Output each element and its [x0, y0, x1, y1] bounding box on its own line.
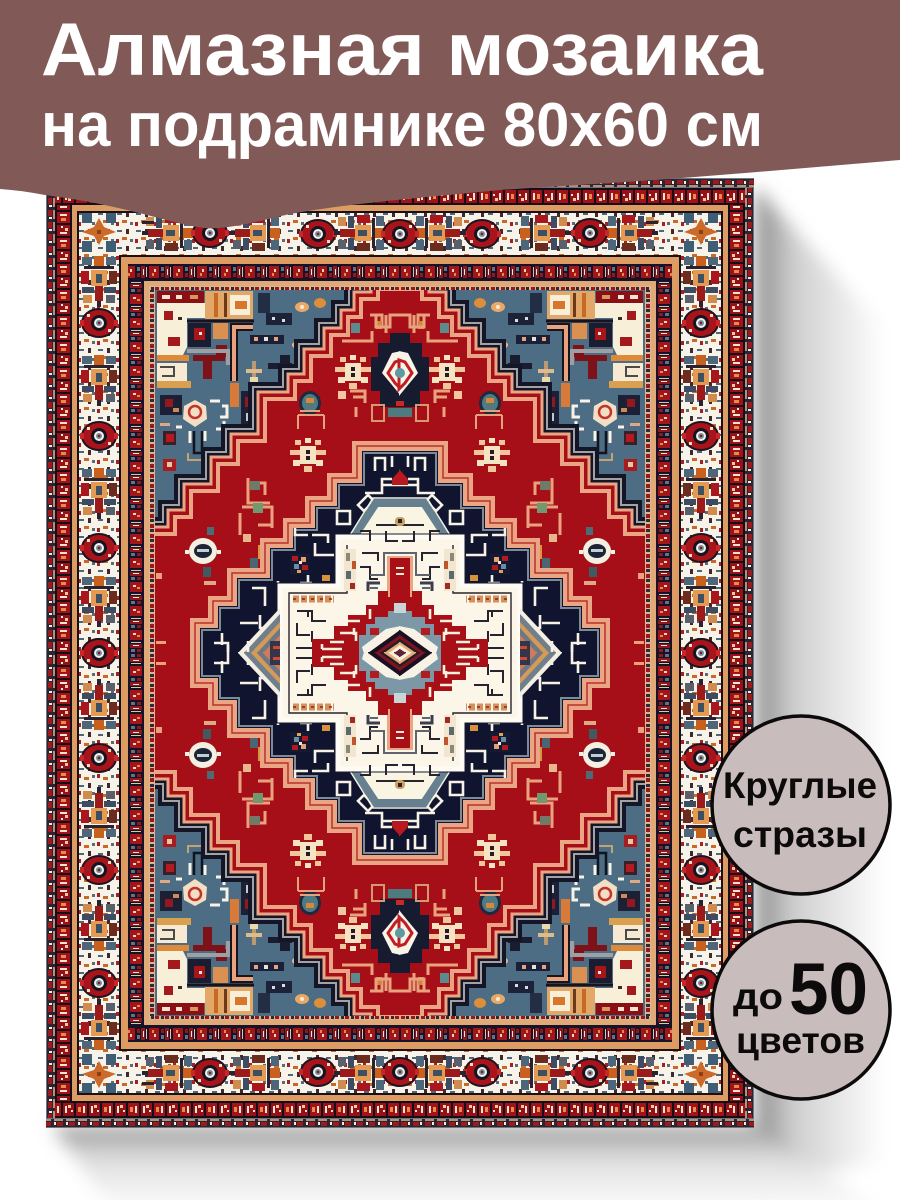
title: Алмазная мозаика	[41, 7, 764, 91]
red field	[150, 291, 401, 654]
field background blue corner	[155, 290, 401, 654]
badge word: до: до	[733, 976, 783, 1017]
round motif on red	[185, 527, 221, 585]
white spiky surround	[362, 626, 401, 654]
carpet top-right quarter	[381, 178, 754, 668]
white maze on navy	[214, 456, 401, 661]
top centre medallion on red field	[371, 315, 405, 421]
inner beaded line	[149, 286, 401, 654]
cream cut-outs in red cross	[322, 609, 370, 649]
black maze on cream	[296, 525, 398, 648]
red stepped cross	[312, 591, 401, 654]
carpet top-left quarter with borders, field and medallion	[46, 178, 419, 668]
inner tan line	[144, 281, 401, 654]
outer thin strip	[46, 178, 401, 654]
left border motifs	[80, 256, 118, 668]
multicolour strip on cross	[344, 549, 356, 591]
central stepped medallion	[195, 446, 404, 661]
canvas shadow below	[52, 1126, 880, 1200]
red triangle ornament	[392, 469, 401, 485]
blue corner rosette	[176, 400, 227, 460]
carpet bottom-left quarter	[46, 638, 419, 1128]
badge: round rhinestones	[712, 716, 890, 894]
subtitle: на подрамнике 80х60 см	[41, 91, 763, 160]
small field motifs on red	[156, 315, 386, 644]
white floral border	[77, 211, 419, 668]
badge number: 50: 50	[789, 949, 868, 1030]
badge text line 2: стразы	[733, 814, 867, 855]
inner dark band	[128, 264, 401, 654]
border corner star	[82, 213, 116, 252]
tan dashes on the cross	[293, 596, 334, 602]
stepped border of the red field	[150, 291, 401, 536]
multicolour patch on navy	[290, 554, 310, 574]
header banner	[0, 0, 900, 228]
corner ornaments	[150, 291, 401, 654]
badge text line 1: Круглые	[723, 765, 877, 806]
tan dash accents	[293, 598, 334, 600]
badge word: цветов: цветов	[736, 1020, 865, 1061]
carpet picture on stretcher	[46, 178, 754, 1128]
badge: up to 50 colours	[712, 921, 890, 1099]
inner tan frame	[119, 255, 401, 654]
outer red band	[55, 188, 401, 654]
vertical red panel	[368, 553, 401, 599]
canvas shadow on the right	[755, 186, 885, 1190]
top border motifs	[142, 215, 419, 251]
central dark diamond	[368, 630, 401, 654]
side triangle	[238, 608, 280, 654]
white cross	[280, 538, 401, 654]
blue inner stair	[359, 611, 401, 654]
octagon	[354, 503, 401, 543]
carpet bottom-right quarter	[381, 638, 754, 1128]
tan frame	[72, 205, 401, 654]
